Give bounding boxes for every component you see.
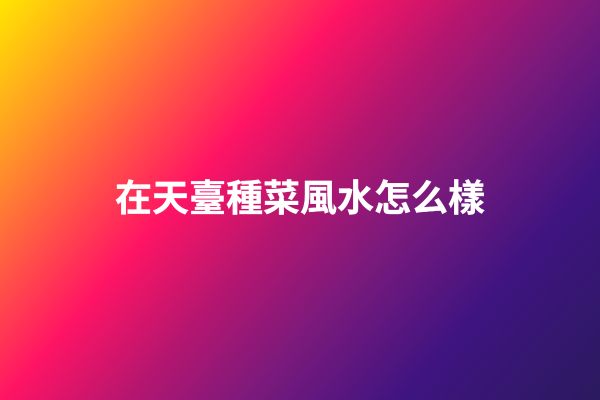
title: 在天臺種菜風水怎么樣	[115, 178, 485, 219]
